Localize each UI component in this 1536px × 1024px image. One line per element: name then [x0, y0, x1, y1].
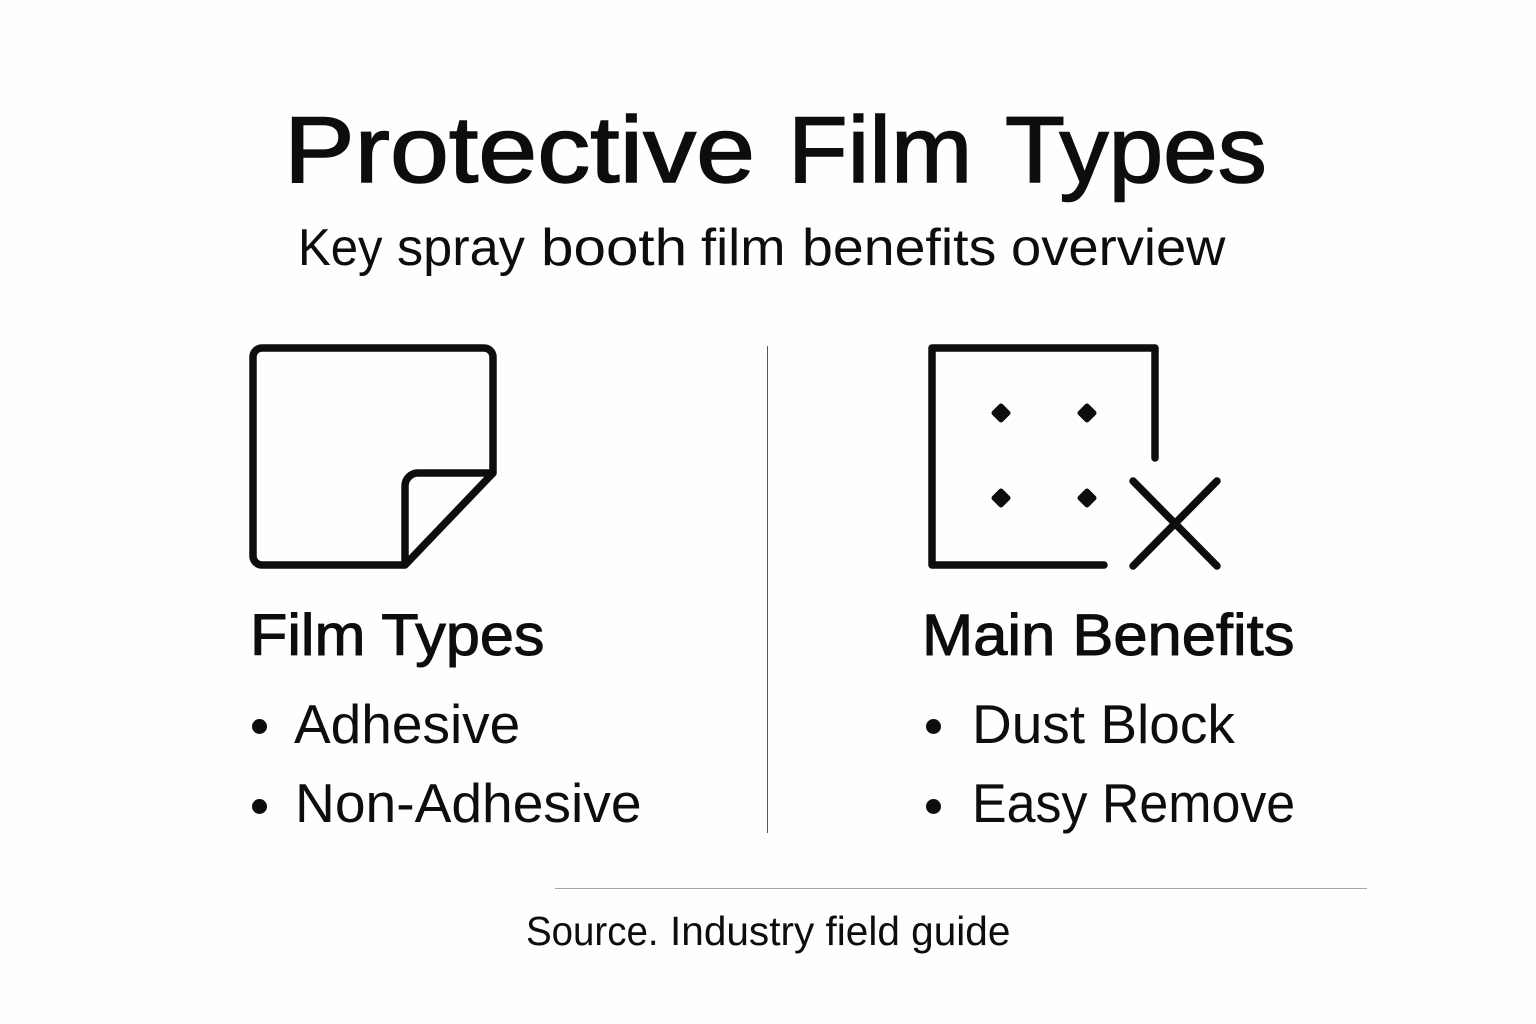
title: Types: [1005, 97, 1267, 202]
heading: film types: Film Types: [250, 603, 544, 668]
subtitle: [298, 219, 1226, 277]
subtitle: film: [701, 219, 786, 277]
bullet: easy remove: [926, 799, 941, 814]
list item: easy remove: Easy Remove: [972, 772, 1295, 834]
bullet: adhesive: [252, 719, 267, 734]
source note: Source.: [526, 908, 659, 954]
heading: main benefits: Main Benefits: [922, 603, 1294, 668]
source note: Industry field guide: [670, 908, 1010, 954]
title: [284, 97, 1267, 202]
source rule: [555, 888, 1367, 889]
subtitle: booth: [541, 219, 687, 277]
title: Film: [788, 97, 972, 202]
list item: non-adhesive: Non-Adhesive: [295, 772, 642, 834]
panel: film types: [250, 603, 642, 834]
icon: dotted panel with cross: [928, 344, 1221, 570]
center divider: [767, 346, 768, 833]
bullet: dust block: [926, 719, 941, 734]
subtitle: benefits: [802, 219, 996, 277]
icon: film sheet with peeled corner: [249, 344, 497, 569]
panel: main benefits: [922, 603, 1295, 834]
subtitle: spray: [397, 219, 525, 277]
list item: adhesive: Adhesive: [294, 693, 520, 755]
bullet: non-adhesive: [252, 799, 267, 814]
subtitle: Key: [298, 219, 383, 277]
subtitle: overview: [1011, 219, 1225, 277]
title: Protective: [284, 97, 755, 202]
list item: dust block: Dust Block: [972, 693, 1235, 755]
